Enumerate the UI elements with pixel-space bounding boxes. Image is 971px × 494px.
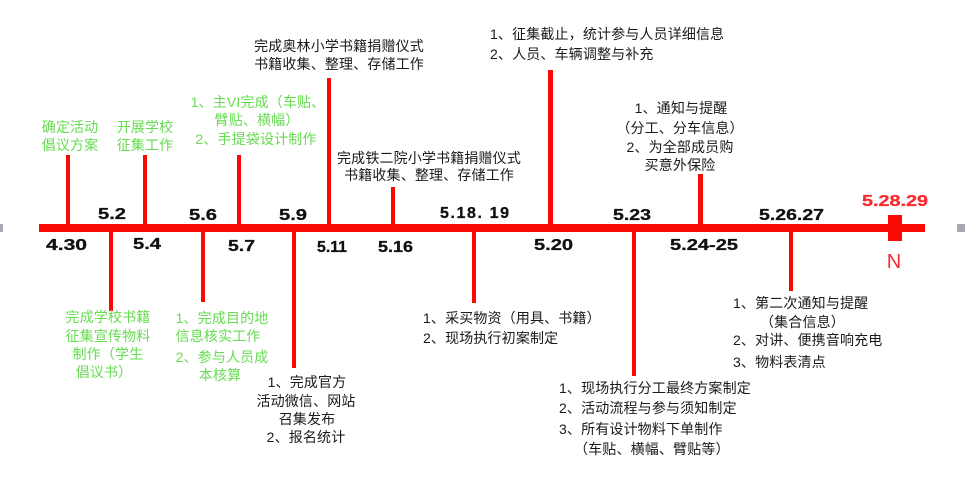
note: 目的地核实: 1、完成目的地 <box>176 310 268 326</box>
date labels: 5.20 <box>534 237 573 254</box>
note: 征集截止 <box>490 26 724 62</box>
date labels: 5.18. 19 <box>440 205 509 222</box>
note: 铁二院小学 <box>337 150 521 183</box>
note: 学校书籍征集物料: 征集宣传物料 <box>66 328 150 344</box>
note: 目的地核实: 本核算 <box>199 367 241 383</box>
note: 开展学校 <box>117 119 173 153</box>
date labels: 5.2 <box>98 206 126 223</box>
note: 学校书籍征集物料 <box>66 309 150 380</box>
note: 学校书籍征集物料: 倡议书） <box>76 364 132 380</box>
date labels: 4.30 <box>46 237 87 254</box>
note: 奥林小学 <box>254 38 424 72</box>
note: 通知与提醒 <box>616 100 744 173</box>
note: 现场执行: 3、所有设计物料下单制作 <box>559 421 723 437</box>
note: 主VI: 2、手提袋设计制作 <box>195 131 317 147</box>
date labels <box>46 205 824 256</box>
note: 第二次通知: （集合信息） <box>760 314 845 330</box>
note: 采买物资 <box>423 310 601 346</box>
note: 主VI: 臂贴、横幅） <box>215 112 299 128</box>
end marker square <box>888 215 902 241</box>
note: 确定活动: 倡议方案 <box>42 137 98 153</box>
note: 铁二院小学: 完成铁二院小学书籍捐赠仪式 <box>337 150 521 166</box>
note: 学校书籍征集物料: 制作（学生 <box>73 346 143 362</box>
note: 学校书籍征集物料: 完成学校书籍 <box>66 309 150 325</box>
date labels: 5.11 <box>317 239 347 256</box>
note: 官方活动 <box>256 374 356 445</box>
date labels: 5.26.27 <box>759 207 824 224</box>
note: 确定活动 <box>42 119 98 153</box>
note: 第二次通知 <box>733 295 882 370</box>
note: 征集截止: 2、人员、车辆调整与补充 <box>490 46 654 62</box>
note: 官方活动: 召集发布 <box>279 411 335 427</box>
note: 目的地核实: 信息核实工作 <box>176 328 260 344</box>
downward connector stems <box>109 231 793 376</box>
note: 目的地核实: 2、参与人员成 <box>176 349 268 365</box>
note: 铁二院小学: 书籍收集、整理、存储工作 <box>344 167 514 183</box>
note: 目的地核实 <box>176 310 268 383</box>
note: 现场执行: 2、活动流程与参与须知制定 <box>559 400 737 416</box>
note: 开展学校: 开展学校 <box>117 119 173 135</box>
note: 奥林小学: 书籍收集、整理、存储工作 <box>254 56 424 72</box>
note: 通知与提醒: 买意外保险 <box>645 157 715 173</box>
note: 通知与提醒: 1、通知与提醒 <box>635 100 727 116</box>
note: 奥林小学: 完成奥林小学书籍捐赠仪式 <box>254 38 424 54</box>
date labels: 5.9 <box>279 207 307 224</box>
final date label: 5.28.29 <box>862 193 928 210</box>
note: 现场执行: 1、现场执行分工最终方案制定 <box>559 380 751 396</box>
date labels: 5.4 <box>133 236 161 253</box>
note: 采买物资: 2、现场执行初案制定 <box>423 330 558 346</box>
note: 第二次通知: 2、对讲、便携音响充电 <box>733 332 882 348</box>
note: 采买物资: 1、采买物资（用具、书籍） <box>423 310 601 326</box>
note: 第二次通知: 1、第二次通知与提醒 <box>733 295 868 311</box>
note: 现场执行 <box>559 380 751 457</box>
upward connector stems <box>66 70 703 225</box>
note: 开展学校: 征集工作 <box>117 137 173 153</box>
note: 官方活动: 活动微信、网站 <box>256 393 356 409</box>
note: 官方活动: 2、报名统计 <box>267 429 345 445</box>
N label: N <box>887 251 901 273</box>
note: 第二次通知: 3、物料表清点 <box>733 354 826 370</box>
date labels: 5.6 <box>189 207 217 224</box>
date labels: 5.24-25 <box>670 237 738 254</box>
note: 通知与提醒: （分工、分车信息） <box>616 120 744 136</box>
timeline axis <box>39 215 925 241</box>
note: 通知与提醒: 2、为全部成员购 <box>626 139 734 155</box>
note: 征集截止: 1、征集截止，统计参与人员详细信息 <box>490 26 724 42</box>
date labels: 5.7 <box>228 238 255 255</box>
note: 主VI <box>191 94 325 147</box>
note: 主VI: 1、主VI完成（车贴、 <box>191 94 325 110</box>
note: 现场执行: （车贴、横幅、臂贴等） <box>574 441 730 457</box>
note: 官方活动: 1、完成官方 <box>268 374 346 390</box>
date labels: 5.16 <box>378 239 413 256</box>
date labels: 5.23 <box>613 207 651 224</box>
note: 确定活动: 确定活动 <box>42 119 98 135</box>
